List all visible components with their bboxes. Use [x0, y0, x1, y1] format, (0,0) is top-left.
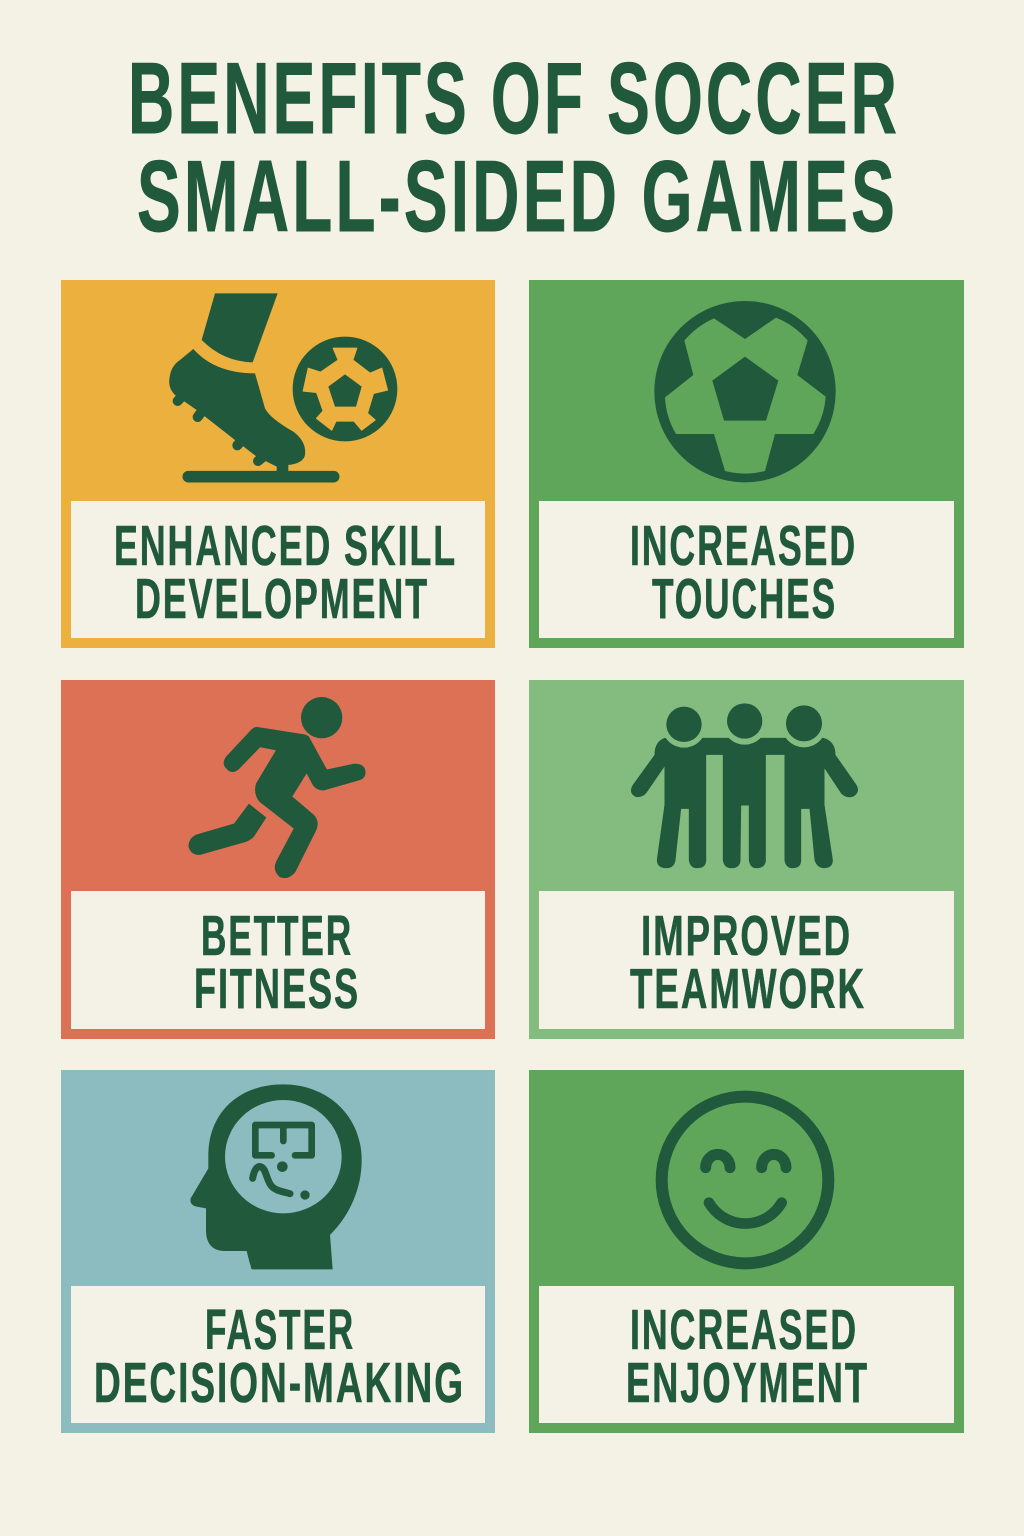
panel: increased enjoyment — [529, 1070, 964, 1433]
icon: soccer ball — [654, 301, 836, 482]
panel: better fitness — [61, 680, 495, 1039]
panel: improved teamwork — [529, 680, 964, 1039]
icon: three teammates — [631, 701, 857, 868]
icon: smiley face — [662, 1097, 828, 1263]
panel: faster decision-making — [61, 1070, 495, 1433]
label box — [539, 501, 954, 638]
label box: TEAMWORK — [630, 957, 866, 1021]
label box: DECISION-MAKING — [94, 1351, 465, 1415]
title — [128, 43, 900, 253]
label box — [71, 891, 485, 1029]
label box: ENJOYMENT — [626, 1351, 869, 1415]
label box — [71, 501, 485, 638]
icon: boot kicking ball — [169, 293, 397, 477]
panel: enhanced skill development — [61, 280, 495, 648]
label box — [539, 891, 954, 1029]
label box: INCREASED — [630, 1298, 858, 1362]
label box: INCREASED — [630, 514, 857, 578]
label box: FITNESS — [194, 957, 360, 1021]
panel: increased touches — [529, 280, 964, 648]
label box: BETTER — [201, 904, 353, 968]
label box: TOUCHES — [652, 567, 837, 631]
label box: DEVELOPMENT — [135, 567, 429, 631]
label box: IMPROVED — [641, 904, 852, 968]
icon: running figure — [189, 697, 365, 878]
label box: FASTER — [205, 1298, 355, 1362]
label box — [71, 1286, 485, 1423]
label box — [539, 1286, 954, 1423]
icon: head with tactics board — [190, 1084, 362, 1269]
label box: ENHANCED SKILL — [114, 514, 457, 578]
